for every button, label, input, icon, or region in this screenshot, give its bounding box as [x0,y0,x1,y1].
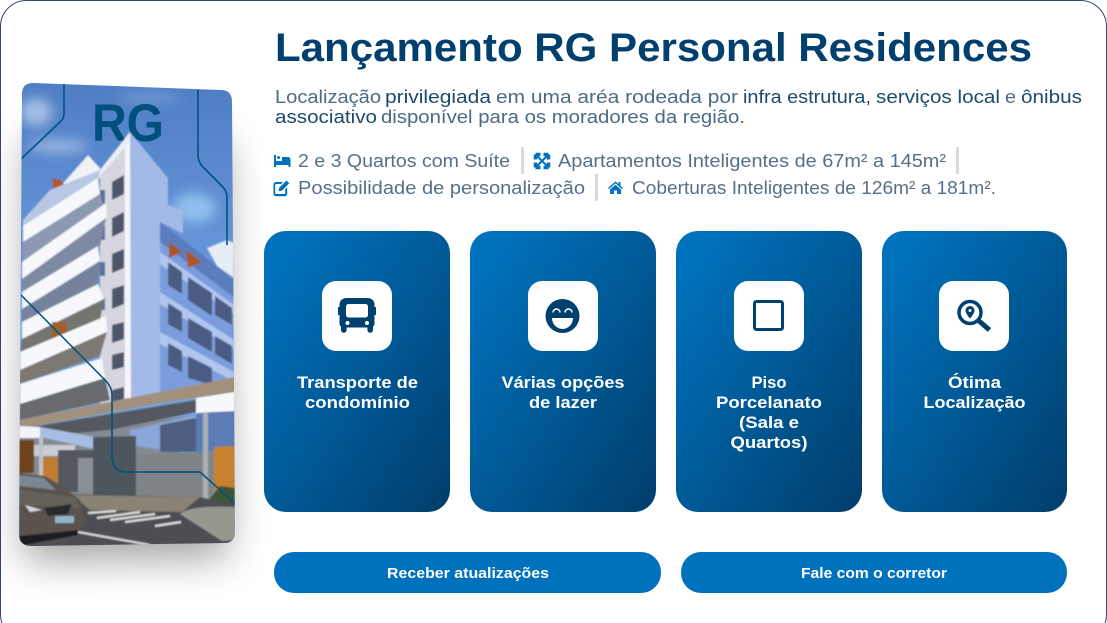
icon: home [608,182,623,194]
intro paragraph: privilegiada [385,87,492,107]
intro paragraph: Localização [275,87,381,107]
label: piso: Quartos) [730,434,808,452]
icon: square [754,302,782,330]
label: piso: (Sala e [739,414,799,432]
label: lazer: de lazer [529,394,598,412]
button: fale com o corretor: Fale com o corretor [801,565,947,582]
intro paragraph: ônibus [1021,87,1082,107]
label: piso: Porcelanato [716,394,822,412]
intro paragraph: serviços local [876,87,1000,107]
icon: bus [338,298,376,333]
label: transporte: Transporte de [297,374,418,392]
icon: edit [274,180,289,196]
icon: bed [274,155,290,167]
logo: RG: RG [92,94,164,153]
intro paragraph: e [1005,87,1016,107]
card: piso [676,231,862,512]
feature: quartos: 2 e 3 Quartos com Suíte [298,150,510,171]
card: localizacao [882,231,1067,512]
label: localizacao: Ótima [948,373,1002,392]
balconies [62,154,101,185]
windows [112,175,124,402]
icon: smile [546,299,580,333]
icon: expand [536,154,548,168]
lower building and wall [20,415,215,500]
label: piso: Piso [752,374,786,392]
intro paragraph: disponível para os moradores da região. [381,107,745,127]
label: localizacao [924,373,1026,412]
button: fale com o corretor [681,552,1067,593]
canopy [19,377,235,429]
intro paragraph: infra estrutura, [743,87,871,107]
button: receber atualizações: Receber atualizações [387,565,549,582]
feature list [274,147,996,201]
feature: coberturas: Coberturas Inteligentes de 126m² a 181m². [632,177,996,198]
card: lazer [470,231,656,512]
button: receber atualizações [274,552,661,593]
icon: location search [959,302,990,330]
label: localizacao: Localização [924,394,1026,412]
street [19,493,235,548]
title: Lançamento RG Personal Residences [275,26,1032,70]
feature: apartamentos: Apartamentos Inteligentes de 67m² a 145m² [558,150,946,171]
feature: personalizacao: Possibilidade de personalização [298,177,585,198]
intro paragraph: em uma aréa rodeada por [496,87,738,107]
intro paragraph [275,87,1082,127]
label: lazer: Várias opções [502,374,624,392]
photo: building render [15,80,240,561]
label: piso [716,374,822,452]
card: transporte [264,231,450,512]
label: lazer [502,374,624,412]
label: transporte [297,374,418,412]
overlay lines [21,84,236,504]
label: transporte: condomínio [305,394,410,412]
car [19,473,85,537]
building faces [100,132,130,405]
intro paragraph: associativo [275,107,377,127]
